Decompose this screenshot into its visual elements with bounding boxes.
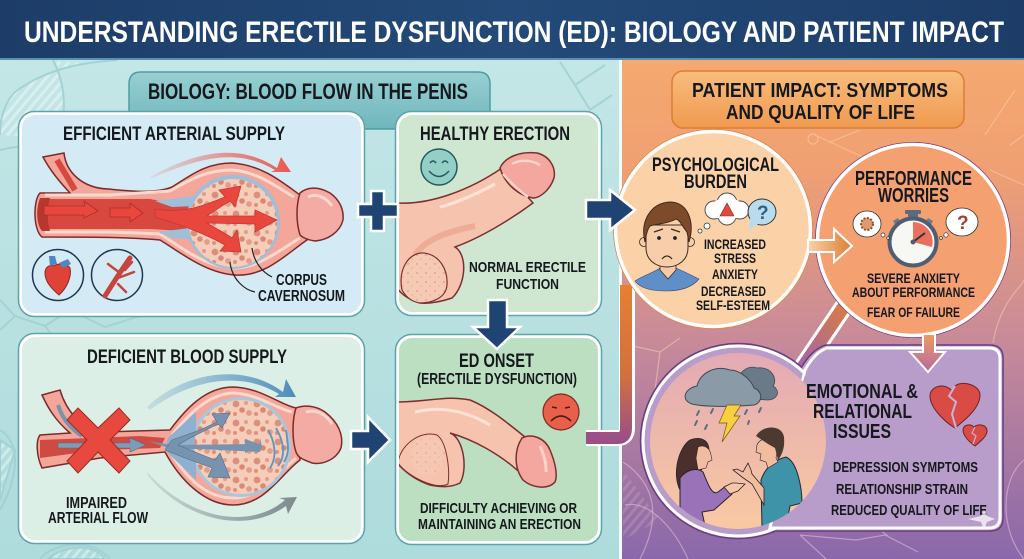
heading: emotional and relational issues: EMOTIONAL & — [806, 381, 918, 403]
heading: healthy erection: HEALTHY ERECTION — [420, 124, 570, 145]
title banner — [0, 0, 1024, 60]
label: normal erectile function: NORMAL ERECTILE — [469, 259, 586, 276]
illustration: ED anatomy — [397, 398, 556, 487]
anatomy diagram: impaired blood flow — [37, 387, 342, 505]
label: normal erectile function: FUNCTION — [496, 276, 559, 293]
icon: plus sign — [358, 191, 398, 231]
list: emotional symptoms: RELATIONSHIP STRAIN — [836, 481, 968, 498]
connector: ED onset to patient impact — [586, 285, 627, 438]
arrow: psychological to performance — [808, 229, 852, 262]
icon: smiling face — [421, 149, 457, 185]
icon: blood vessels — [92, 250, 142, 300]
illustration: normal anatomy — [397, 153, 554, 303]
heading: performance worries: PERFORMANCE — [855, 168, 972, 190]
icon: red X blockage — [67, 408, 130, 473]
heading: biology: BIOLOGY: BLOOD FLOW IN THE PENIS — [148, 79, 468, 104]
heading: ED onset — [417, 351, 577, 388]
heading: ED onset: (ERECTILE DYSFUNCTION) — [417, 371, 577, 388]
list: emotional symptoms — [831, 459, 987, 519]
arrow: healthy to ED onset — [473, 300, 520, 349]
list: emotional symptoms: DEPRESSION SYMPTOMS — [833, 459, 978, 476]
panel: efficient arterial supply — [18, 112, 364, 316]
icon: heart — [32, 250, 84, 300]
list: performance symptoms — [852, 270, 975, 320]
list: psychological symptoms: INCREASED — [704, 236, 766, 252]
panel: emotional and relational issues — [640, 344, 1003, 538]
label: impaired arterial flow: ARTERIAL FLOW — [48, 510, 149, 527]
heading: ED onset: ED ONSET — [459, 351, 534, 372]
list: performance symptoms: FEAR OF FAILURE — [867, 304, 960, 320]
arrow: deficient supply to ED onset — [351, 417, 390, 462]
list: performance symptoms: SEVERE ANXIETY — [867, 270, 960, 286]
heading: deficient blood supply: DEFICIENT BLOOD SUPPLY — [87, 347, 287, 368]
heading: patient impact — [672, 71, 964, 128]
icon: question thought bubble: ? — [957, 213, 969, 234]
list: psychological symptoms: ANXIETY — [712, 266, 758, 282]
icon: stopwatch — [890, 210, 936, 266]
list: psychological symptoms: STRESS — [714, 250, 756, 266]
panel: healthy erection — [396, 112, 602, 316]
label: normal erectile function — [469, 259, 586, 293]
icon: sad face — [543, 394, 579, 430]
list: psychological symptoms: DECREASED — [701, 283, 766, 299]
heading: psychological burden — [652, 155, 779, 193]
heading: emotional and relational issues: RELATIONAL — [813, 401, 912, 423]
label: difficulty achieving or maintaining an erection: MAINTAINING AN ERECTION — [418, 516, 581, 533]
icon: worried person — [635, 202, 699, 291]
label: impaired arterial flow: IMPAIRED — [66, 495, 127, 512]
flow arrow: red — [150, 153, 291, 178]
heading: patient impact: PATIENT IMPACT: SYMPTOMS — [692, 80, 948, 102]
heading: psychological burden: PSYCHOLOGICAL — [652, 155, 779, 176]
panel: psychological burden — [613, 129, 813, 329]
illustration: couple under storm cloud — [650, 353, 826, 530]
arrow: into psychological burden — [586, 190, 635, 230]
list: psychological symptoms: SELF-ESTEEM — [696, 297, 770, 313]
label: difficulty achieving or maintaining an erection — [418, 500, 581, 533]
label: corpus cavernosum: CORPUS — [276, 272, 327, 289]
icon: gear thought bubble — [853, 211, 889, 239]
icon: worried thought bubbles: ? — [757, 203, 769, 224]
heading: efficient arterial supply: EFFICIENT ARTERIAL SUPPLY — [63, 124, 285, 145]
background: patient impact side — [622, 0, 1024, 559]
label: difficulty achieving or maintaining an erection: DIFFICULTY ACHIEVING OR — [420, 500, 577, 517]
heading: performance worries: WORRIES — [878, 185, 949, 207]
heading: emotional and relational issues — [806, 381, 918, 443]
panel: performance worries — [815, 142, 1011, 338]
label: impaired arterial flow — [48, 495, 149, 527]
icon: storm cloud — [685, 367, 777, 442]
list: psychological symptoms — [696, 236, 770, 313]
arrow: diagonal performance to emotional — [803, 305, 845, 367]
heading: emotional and relational issues: ISSUES — [833, 421, 891, 443]
icon: worried thought bubbles — [698, 193, 776, 233]
panel: ED onset — [396, 334, 602, 544]
background: biology side — [0, 0, 619, 559]
heading: performance worries — [855, 168, 972, 207]
list: performance symptoms: ABOUT PERFORMANCE — [852, 284, 975, 300]
label: corpus cavernosum — [258, 272, 345, 305]
arrow: performance to emotional — [910, 334, 945, 372]
heading: biology — [129, 72, 490, 129]
panel: deficient blood supply — [18, 334, 364, 544]
anatomy diagram: healthy blood flow — [35, 153, 343, 292]
heading: patient impact: AND QUALITY OF LIFE — [726, 102, 915, 124]
flow arrow: weak blue — [147, 374, 296, 410]
label: corpus cavernosum: CAVERNOSUM — [258, 288, 345, 305]
flow arrow: weak grey — [147, 472, 297, 521]
heading: psychological burden: BURDEN — [684, 172, 747, 193]
icon: question thought bubble — [940, 208, 978, 239]
icon: broken hearts — [930, 383, 987, 446]
